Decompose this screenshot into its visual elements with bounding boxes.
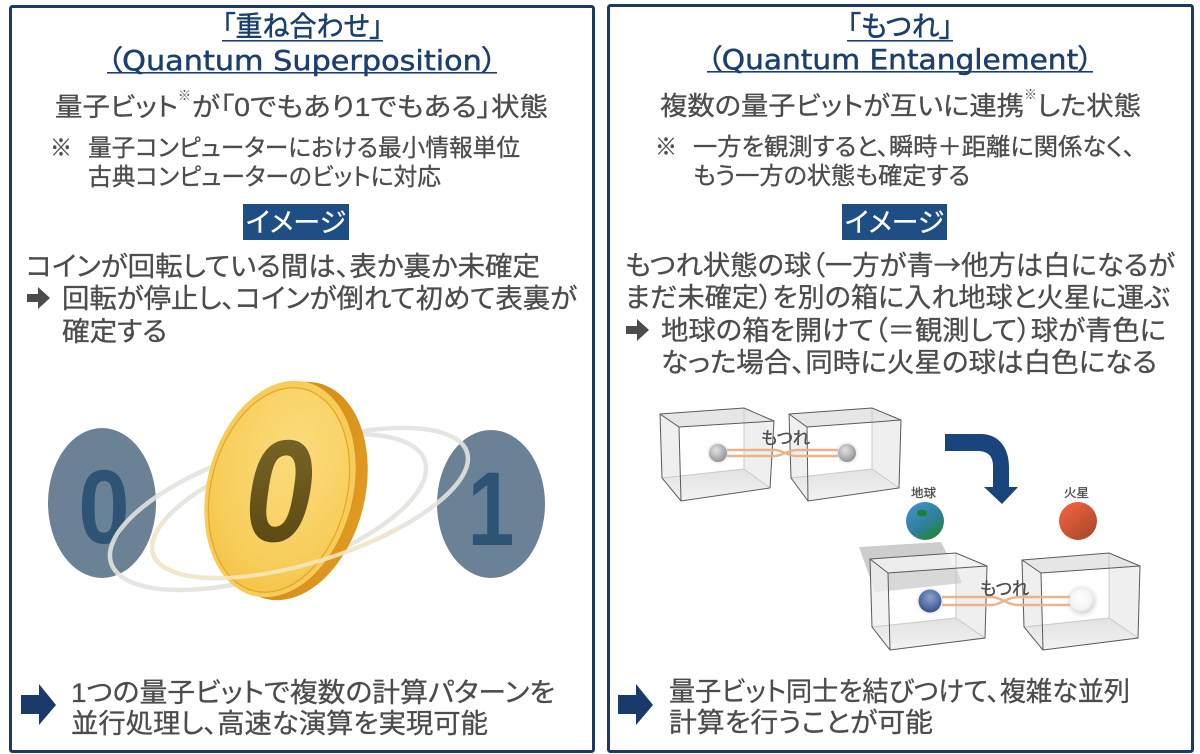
heading: entanglement: （Quantum Entanglement） (707, 43, 1093, 76)
label: image heading: イメージ (845, 208, 944, 238)
icon: faded coin 1 (437, 430, 545, 578)
text: boxes explanation: 地球の箱を開けて（＝観測して）球が青色に (661, 316, 1166, 346)
icon: gold coin (183, 365, 390, 616)
panel: quantum superposition (10, 6, 594, 752)
text: boxes explanation: なった場合、同時に火星の球は白色になる (661, 348, 1157, 378)
text: qubit definition (55, 88, 548, 122)
text: coin explanation: コインが回転している間は、表か裏か未確定 (26, 252, 540, 282)
icon: faded coin 1: 1 (468, 451, 514, 568)
heading: entanglement (707, 11, 1093, 76)
text: qubit definition: が「0でもあり1でもある」状態 (192, 92, 548, 122)
text: coin explanation: 確定する (62, 317, 167, 347)
panel: quantum entanglement (608, 6, 1192, 752)
text: entanglement note: 一方を観測すると、瞬時＋距離に関係なく、 (693, 134, 1135, 161)
text: coin explanation (26, 252, 577, 347)
arrow: conclusion (21, 684, 56, 725)
icon: box 2 with sphere (789, 408, 901, 501)
text: boxes explanation: まだ未確定）を別の箱に入れ地球と火星に運ぶ (625, 283, 1170, 313)
entanglement lines: bottom (942, 597, 1070, 605)
entanglement lines: top (727, 450, 838, 456)
text: entanglement definition: した状態 (1037, 91, 1141, 121)
icon: faded coin 0 (48, 428, 156, 578)
text: coin explanation: 回転が停止し、コインが倒れて初めて表裏が (62, 284, 577, 314)
text: qubit note: 量子コンピューターにおける最小情報単位 (88, 135, 520, 162)
label: entanglement top: もつれ (761, 429, 810, 448)
label: image heading: イメージ (246, 208, 346, 238)
arrow: conclusion (618, 684, 653, 725)
arrow: transport to planets (945, 434, 1018, 504)
text: entanglement note: もう一方の状態も確定する (693, 163, 970, 190)
conclusion: entanglement (618, 677, 1130, 738)
text: qubit note: ※ (50, 135, 72, 162)
text: boxes explanation (625, 244, 1175, 378)
text: qubit definition: 量子ビット (55, 92, 178, 122)
icon: gold coin: 0 (245, 410, 313, 572)
conclusion: superposition: 並行処理し、高速な演算を実現可能 (71, 709, 488, 739)
icon: open box with blue sphere (859, 542, 987, 650)
label: mars: 火星 (1064, 486, 1089, 500)
icon: box 1 with sphere (660, 408, 774, 501)
text: entanglement definition (660, 87, 1141, 121)
text: entanglement definition: 複数の量子ビットが互いに連携 (660, 91, 1024, 121)
icon: box with white sphere (1022, 553, 1140, 650)
text: entanglement note (655, 134, 1135, 190)
conclusion: entanglement: 量子ビット同士を結びつけて、複雑な並列 (669, 677, 1130, 707)
text: boxes explanation: もつれ状態の球（一方が青→他方は白になるが (625, 244, 1175, 283)
icon: mars (1059, 502, 1097, 540)
heading: superposition (107, 11, 497, 77)
text: qubit note: 古典コンピューターのビットに対応 (88, 164, 441, 191)
illustration: spinning coin (48, 365, 545, 622)
label: entanglement bottom: もつれ (980, 579, 1029, 599)
conclusion: superposition: 1つの量子ビットで複数の計算パターンを (71, 678, 555, 708)
text: entanglement definition: ※ (1024, 87, 1037, 102)
heading: superposition: （Quantum Superposition） (107, 44, 497, 77)
text: entanglement note: ※ (655, 134, 677, 161)
text: qubit definition: ※ (178, 88, 191, 103)
conclusion: superposition (21, 678, 555, 739)
conclusion: entanglement: 計算を行うことが可能 (669, 708, 933, 738)
heading: entanglement: 「もつれ」 (847, 11, 953, 42)
icon: earth (906, 502, 944, 540)
heading: superposition: 「重ね合わせ」 (222, 11, 383, 42)
label: earth: 地球 (911, 485, 936, 500)
icon: faded coin 0: 0 (78, 447, 130, 565)
text: qubit note (50, 135, 520, 191)
illustration: entangled boxes (660, 408, 1140, 650)
